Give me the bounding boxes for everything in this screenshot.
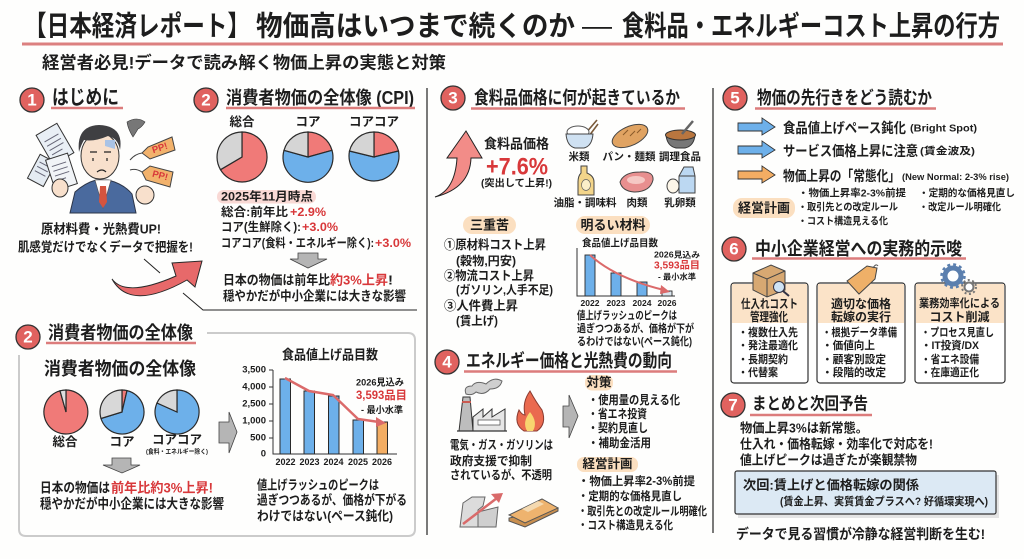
text: peak note	[257, 478, 407, 524]
heading: section 3	[441, 86, 685, 110]
text: intro message: 肌感覚だけでなくデータで把握を!	[18, 240, 193, 254]
panel: card cost management	[731, 283, 808, 383]
chart: food price hike item count bars: 1,000	[242, 416, 266, 426]
chart: food price hike item count bars: 3,593品目	[356, 389, 407, 402]
callout: next issue: (賃金上昇、実質賃金プラスへ? 好循環実現へ)	[780, 494, 988, 508]
callout: food price +7.6%: (突出して上昇!)	[481, 176, 552, 190]
heading: section 6	[722, 237, 966, 261]
text: energy note: されているが、不透明	[450, 467, 552, 482]
text: plan list 5: ・物価上昇率2-3%前提	[798, 186, 906, 200]
text: triple burden list: ①原材料コスト上昇	[444, 237, 546, 252]
panel: card price pass-through: 適切な価格	[831, 296, 891, 311]
icon: rice bowl	[566, 120, 598, 148]
text: summary: 値上げピークは過ぎたが楽観禁物	[740, 452, 917, 468]
heading: section 2 CPI	[194, 88, 415, 112]
heading: section 3: 食料品価格に何が起きているか	[474, 87, 680, 108]
title: 【日本経済レポート】	[24, 10, 250, 42]
chart: small food hike chart: 2023	[607, 298, 626, 308]
chart: food price hike item count bars	[242, 346, 407, 467]
panel: section 6 implications	[722, 237, 1005, 383]
heading: section 5	[723, 86, 936, 110]
text: CPI conclusion: 日本の物価は前年比	[223, 272, 330, 288]
chart: food price hike item count bars: 0	[261, 448, 266, 460]
chart: three pie charts	[217, 114, 399, 182]
text: food labels row 2: 肉類	[626, 196, 648, 209]
text: outlook item 1: 食品値上げペース鈍化	[783, 120, 906, 136]
panel: card price pass-through: 転嫁の実行	[831, 309, 891, 324]
icon: money stack	[509, 499, 558, 527]
chart: lower pie charts: 総合	[52, 434, 78, 449]
text: outlook item 3: 物価上昇の「常態化」	[783, 168, 900, 184]
text: summary: 仕入れ・価格転嫁・効率化で対応を!	[740, 436, 933, 452]
panel: card efficiency: ・IT投資/DX	[921, 338, 980, 352]
heading: section 6: 中小企業経営への実務的示唆	[755, 239, 962, 259]
panel: section 4 energy	[435, 350, 707, 532]
chart: food price hike item count bars: 2025	[348, 457, 368, 467]
icon: flame	[517, 391, 544, 431]
heading: section 7	[721, 393, 872, 417]
text: outlook item 1: (Bright Spot)	[910, 124, 977, 134]
text: measures list: ・補助金活用	[588, 435, 651, 450]
chart: three pie charts: 総合	[229, 114, 255, 129]
text: lower conclusion: 日本の物価は	[40, 480, 110, 496]
chart: lower pie charts: コアコア	[152, 433, 202, 447]
icon: cardboard box with magnifier	[753, 265, 789, 297]
heading: lower section 2	[16, 323, 196, 349]
heading: section 2 CPI: 消費者物価の全体像 (CPI)	[226, 88, 414, 108]
text: CPI conclusion: !	[388, 272, 393, 288]
text: small chart note: るわけではない(ペース鈍化)	[577, 334, 692, 348]
panel: card cost management: 仕入れコスト	[741, 296, 798, 311]
chart: small food hike chart	[577, 236, 700, 308]
panel: card cost management: 管理強化	[750, 309, 788, 324]
title: 物価高はいつまで続くのか	[256, 10, 575, 42]
text: energy note: 政府支援で抑制	[450, 453, 532, 468]
chart: small food hike chart: - 最小水準	[658, 272, 696, 282]
text: intro message	[18, 222, 193, 254]
panel: card efficiency: コスト削減	[929, 309, 990, 324]
heading: section 1: はじめに	[52, 87, 119, 109]
label: management plan 5: 経営計画	[738, 200, 790, 216]
text: plan list 5	[798, 186, 1015, 228]
text: energy note	[450, 437, 553, 482]
text: measures list: ・契約見直し	[588, 420, 648, 435]
icon: worried businessman with bills and price tags	[27, 119, 175, 213]
panel: card cost management: ・発注最適化	[738, 338, 798, 352]
callout: date and values: +3.0%	[375, 236, 411, 250]
label: triple burden	[463, 216, 516, 234]
arrow: blue arrow 2	[738, 141, 775, 158]
chart: small food hike chart: 3,593品目	[654, 260, 700, 272]
panel: card efficiency: ・在庫適正化	[921, 365, 979, 379]
panel: card price pass-through: ・価値向上	[822, 338, 875, 352]
text: small chart note: 過ぎつつあるが、価格が下が	[577, 321, 694, 335]
text: food labels row 2: 乳卵類	[664, 196, 696, 209]
text: triple burden list	[444, 237, 553, 328]
panel: card efficiency: ・省エネ設備	[921, 352, 979, 366]
arrow: blue arrow 1	[738, 118, 775, 135]
panel: card efficiency	[915, 283, 1005, 383]
callout: date and values: +2.9%	[290, 205, 326, 219]
text: management plan list: ・物価上昇率2-3%前提	[578, 474, 695, 488]
text: plan list 5: ・定期的な価格見直し	[919, 186, 1015, 200]
heading: lower section 2: 消費者物価の全体像	[48, 323, 193, 343]
chart: food price hike item count bars: 2023	[299, 457, 320, 467]
chart: food price hike item count bars: 2022	[275, 457, 296, 467]
panel: section 2 CPI overview	[194, 88, 415, 304]
callout: date and values	[217, 188, 411, 250]
chart: small food hike chart: 2026	[658, 298, 677, 308]
chart: food price hike item count bars: 2,500	[242, 398, 266, 410]
label: triple burden: 三重苦	[470, 218, 509, 232]
heading: section 7: まとめと次回予告	[752, 394, 868, 414]
callout: date and values: コアコア(食料・エネルギー除く):	[221, 235, 374, 250]
text: management plan list: ・コスト構造見える化	[578, 518, 673, 532]
arrow: red curved arrow	[112, 261, 202, 296]
text: energy note: 電気・ガス・ガソリンは	[450, 437, 553, 452]
panel: card cost management: ・代替案	[738, 365, 778, 379]
heading: section 1	[20, 87, 123, 112]
label: management plan: 経営計画	[582, 456, 633, 471]
text: measures list	[588, 392, 680, 450]
arrow: rising food price arrow	[435, 131, 482, 197]
chart: small food hike chart: 2022	[581, 298, 600, 308]
heading: inner title: 消費者物価の全体像	[44, 359, 196, 379]
text: outlook item 3: (New Normal: 2-3% rise)	[902, 172, 1009, 182]
chart: food price hike item count bars: 3,500	[242, 364, 266, 376]
subtitle: 経営者必見!データで読み解く物価上昇の実態と対策	[42, 52, 446, 72]
title	[22, 10, 1003, 46]
text: food labels row 2: 油脂・調味料	[554, 196, 617, 209]
chart: food price hike item count bars: 2026見込み	[356, 376, 404, 388]
panel: card price pass-through: ・根拠データ準備	[822, 325, 897, 339]
heading: section 3: 3	[448, 88, 458, 108]
icon: oil bottle	[578, 166, 594, 195]
text: intro message: 原材料費・光熱費UP!	[41, 222, 161, 236]
text: peak note: わけではない(ペース鈍化)	[257, 508, 393, 524]
text: plan list 5: ・コスト構造見える化	[798, 214, 888, 228]
text: measures list: ・使用量の見える化	[588, 392, 680, 407]
icon: bread	[609, 120, 651, 152]
text: triple burden list: ③人件費上昇	[444, 298, 518, 313]
chart: small food hike chart: 2026見込み	[654, 250, 700, 260]
text: food labels row 1	[568, 150, 701, 163]
icon: meat	[620, 172, 653, 192]
heading: section 5: 物価の先行きをどう読むか	[757, 88, 932, 108]
panel: card cost management: ・複数仕入先	[738, 325, 798, 339]
callout: food price +7.6%	[481, 136, 552, 190]
panel: card price pass-through: ・段階的改定	[822, 365, 886, 379]
panel: lower consumer price overview	[16, 323, 415, 536]
callout: date and values: コア(生鮮除く):	[221, 219, 301, 234]
text: outlook item 2: サービス価格上昇に注意	[783, 143, 918, 159]
panel: section 3 food prices	[435, 86, 701, 348]
text: triple burden list: (穀物,円安)	[456, 253, 516, 268]
chart: small food hike chart: 2024	[633, 298, 652, 308]
label: measures: 対策	[586, 374, 612, 390]
panel: card efficiency: ・プロセス見直し	[921, 325, 994, 339]
chart: food price hike item count bars: 2024	[323, 457, 344, 467]
label: bright materials: 明るい材料	[580, 218, 646, 232]
text: food labels row 2	[554, 196, 696, 209]
text: summary: 物価上昇3%は新常態。	[740, 420, 868, 436]
text: lower conclusion: 穏やかだが中小企業には大きな影響	[40, 496, 224, 512]
arrow: gray down arrow	[290, 253, 327, 268]
panel: card cost management: ・長期契約	[738, 352, 788, 366]
heading: section 2 CPI: 2	[201, 90, 211, 110]
heading: section 5: 5	[730, 88, 740, 108]
text: plan list 5: ・取引先との改定ルール	[798, 200, 898, 214]
icon: cooked dish pot	[666, 121, 696, 148]
text: outlook item 2: (賃金波及)	[920, 144, 975, 158]
arrow: orange arrow	[738, 166, 775, 183]
arrow: gray right arrow	[219, 412, 237, 453]
callout: date and values: 2025年11月時点	[221, 188, 313, 204]
text: CPI conclusion	[223, 272, 406, 304]
heading: section 1: 1	[27, 90, 37, 110]
text: outlook item 3	[783, 168, 1009, 184]
text: triple burden list: ②物流コスト上昇	[444, 268, 534, 283]
text: measures list: ・省エネ投資	[588, 406, 647, 421]
icon: gears	[942, 264, 976, 294]
icon: worried businessman with bills and price tags: PP!	[151, 169, 169, 183]
chart: food price hike item count bars: 4,000	[242, 382, 266, 392]
text: peak note: 過ぎつつあるが、価格が下がる	[257, 492, 407, 508]
panel: section 1 introduction	[18, 87, 417, 310]
text: lower conclusion: 前年比約3%上昇!	[111, 480, 213, 496]
text: CPI conclusion: 約3%上昇	[330, 272, 388, 288]
heading: lower section 2: 2	[23, 328, 33, 346]
chart: food price hike item count bars: 2026	[372, 457, 392, 467]
icon: rising cost boxes with arrow	[460, 493, 503, 527]
callout: date and values: +3.0%	[302, 220, 338, 234]
text: CPI conclusion: 穏やかだが中小企業には大きな影響	[223, 288, 406, 304]
chart: lower pie charts: (食料・エネルギー除く)	[146, 446, 208, 456]
text: closing message: データで見る習慣が冷静な経営判断を生む!	[736, 526, 985, 542]
text: food labels row 1: 米類	[568, 150, 590, 163]
panel: section 7 summary	[721, 393, 999, 542]
callout: date and values: 総合:前年比	[221, 204, 288, 219]
chart: three pie charts: コアコア	[349, 115, 399, 129]
chart: three pie charts: コア	[295, 115, 321, 129]
panel: card price pass-through: ・顧客別設定	[822, 352, 886, 366]
text: management plan list: ・取引先との改定ルール明確化	[578, 504, 707, 518]
arrow: gray down arrow lower	[103, 458, 140, 473]
text: food labels row 1: パン・麺類	[602, 150, 656, 163]
text: food labels row 1: 調理食品	[659, 150, 701, 163]
icon: worried businessman with bills and price tags: PP!	[151, 141, 169, 156]
panel: card price pass-through	[817, 283, 905, 383]
chart: small food hike chart: 食品値上げ品目数	[582, 236, 658, 250]
text: triple burden list: (賃上げ)	[456, 313, 498, 328]
chart: food price hike item count bars: - 最小水準	[361, 404, 403, 415]
text: small chart note: 値上げラッシュのピークは	[577, 308, 677, 322]
chart: food price hike item count bars: 500	[250, 432, 266, 444]
icon: milk and egg	[667, 167, 695, 193]
text: summary	[740, 420, 933, 468]
heading: section 4: 4	[442, 352, 452, 372]
panel: section 5 outlook	[723, 86, 1015, 228]
callout: next issue: 次回:賃上げと価格転嫁の関係	[743, 478, 919, 492]
text: peak note: 値上げラッシュのピークは	[257, 478, 379, 492]
icon: factory with smoke	[457, 379, 507, 431]
panel: card efficiency: 業務効率化による	[919, 296, 1000, 310]
heading: section 7: 7	[728, 396, 738, 414]
text: management plan list	[578, 474, 707, 532]
callout: food price +7.6%: +7.6%	[486, 154, 548, 180]
chart: lower pie charts	[44, 390, 208, 456]
text: plan list 5: ・改定ルール明確化	[919, 200, 1001, 214]
callout: food price +7.6%: 食料品価格	[484, 136, 549, 152]
arrow: gray right arrow energy	[563, 395, 578, 438]
callout: next issue	[735, 471, 999, 518]
text: small chart note	[577, 308, 694, 348]
label: management plan 5	[733, 198, 795, 218]
icon: price tag	[847, 265, 878, 294]
text: lower conclusion	[40, 480, 224, 512]
chart: lower pie charts: コア	[109, 435, 135, 449]
heading: section 6: 6	[729, 240, 739, 258]
chart: food price hike item count bars: 食品値上げ品目数	[282, 346, 378, 362]
text: management plan list: ・定期的な価格見直し	[578, 489, 682, 503]
heading: section 4: エネルギー価格と光熱費の動向	[466, 351, 672, 371]
heading: section 4	[435, 350, 677, 374]
text: triple burden list: (ガソリン,人手不足)	[456, 282, 553, 297]
